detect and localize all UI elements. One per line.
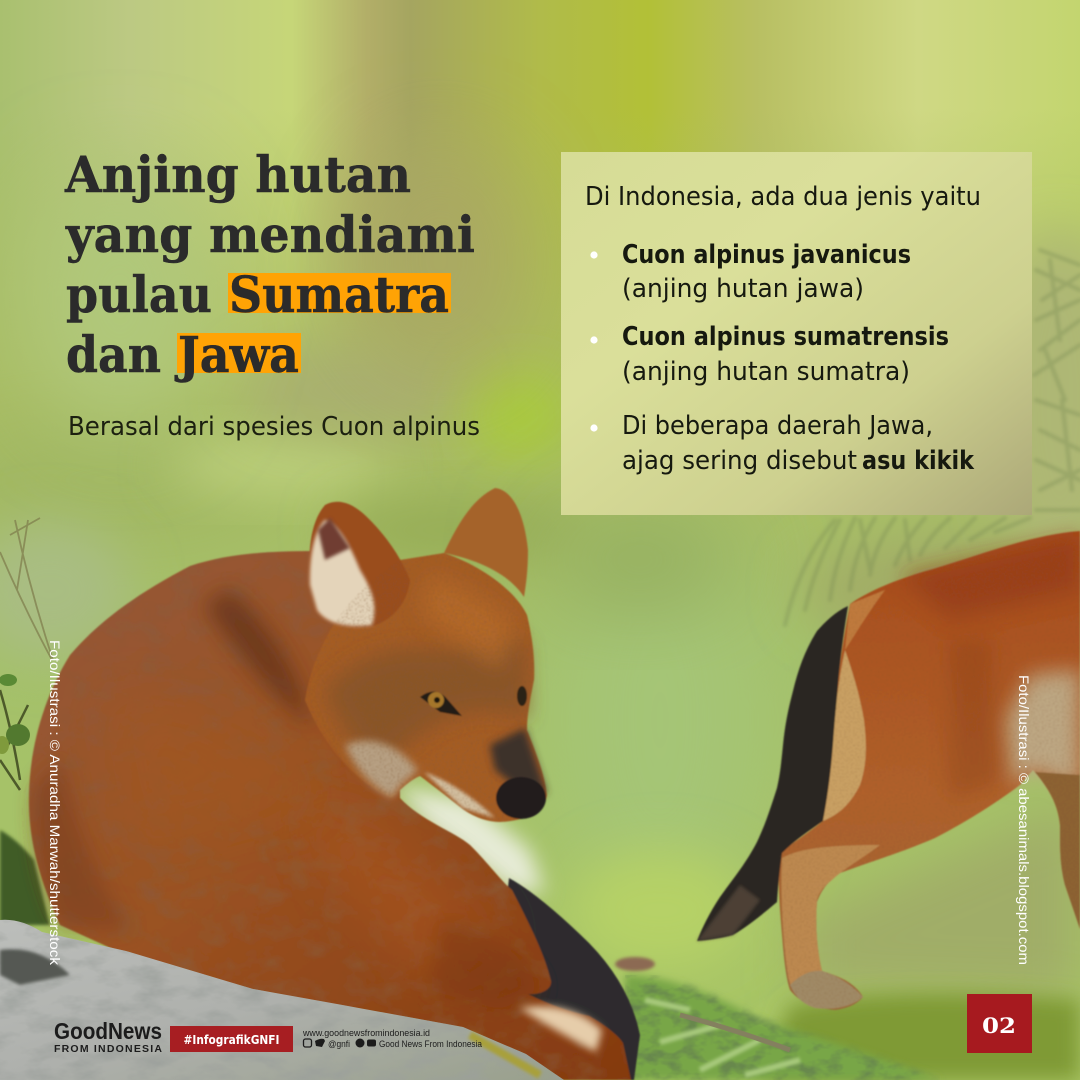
- photo credit right: Foto/Ilustrasi : © abesanimals.blogspot.com: [1016, 675, 1032, 965]
- footer logo: GoodNews: [54, 1018, 162, 1044]
- upper dark band: [900, 535, 1080, 620]
- hashtag badge: #InfografikGNFI: [184, 1033, 280, 1047]
- bullet 1: [590, 240, 911, 304]
- nose: [496, 777, 546, 819]
- bullet 2: Cuon alpinus sumatrensis: [622, 322, 949, 352]
- bullet 3: Di beberapa daerah Jawa,: [622, 411, 933, 441]
- left plant stems and leaves: [0, 518, 53, 925]
- icon: instagram: [304, 1039, 312, 1047]
- title: Jawa: [174, 325, 299, 384]
- orange fold by tail base: [845, 590, 885, 650]
- dhole photo: left animal: [29, 488, 640, 1080]
- title: [64, 145, 475, 384]
- title: dan: [66, 325, 161, 384]
- photo credit left: Foto/Ilustrasi : © Anuradha Marwah/shutterstock: [47, 640, 63, 966]
- footer logo: [54, 1018, 162, 1055]
- ear left inner: [310, 520, 374, 626]
- bamboo leaves illustration: [785, 250, 1080, 625]
- foreground grass: [615, 957, 940, 1080]
- info panel: [561, 152, 1032, 515]
- panel intro: Di Indonesia, ada dua jenis yaitu: [585, 182, 981, 212]
- muzzle dark: [490, 728, 547, 794]
- leg highlight: [781, 845, 880, 1009]
- title: pulau: [66, 265, 212, 324]
- tail black: [500, 878, 640, 1080]
- bullet 1: Cuon alpinus javanicus: [622, 240, 911, 270]
- pale thigh stripe: [823, 650, 866, 821]
- illustrated dhole: right animal: [697, 531, 1080, 1010]
- bullet 2: [590, 322, 949, 387]
- page number badge: 02: [982, 1013, 1016, 1038]
- tail white tip: [520, 1006, 602, 1052]
- bullet 3: asu kikik: [862, 446, 975, 476]
- footer links and social icons: Good News From Indonesia: [379, 1039, 482, 1049]
- bullet 3: ajag sering disebut: [622, 446, 857, 476]
- page number badge: [967, 994, 1032, 1053]
- icon: facebook: [356, 1038, 364, 1048]
- tail tip: [697, 885, 760, 941]
- icon: twitter: [315, 1039, 325, 1047]
- paw: [790, 971, 863, 1009]
- ear right: [444, 488, 528, 597]
- rock: [0, 920, 564, 1080]
- black tail: [697, 606, 848, 941]
- subtitle: Berasal dari spesies Cuon alpinus: [68, 412, 480, 442]
- far eye: [517, 686, 527, 706]
- bullet 1: (anjing hutan jawa): [622, 274, 864, 304]
- hashtag badge: [170, 1026, 293, 1052]
- footer links and social icons: [302, 1028, 482, 1049]
- front leg: [1035, 772, 1080, 929]
- icon: youtube: [367, 1040, 376, 1046]
- title: yang mendiami: [65, 205, 475, 264]
- bullet 3: [590, 411, 975, 476]
- body shading: [205, 590, 312, 725]
- white chest blur behind dhole: [396, 786, 545, 893]
- footer links and social icons: www.goodnewsfromindonesia.id: [302, 1028, 430, 1039]
- footer links and social icons: @gnfi: [328, 1039, 350, 1049]
- bullet 2: (anjing hutan sumatra): [622, 357, 910, 387]
- title: Sumatra: [229, 265, 449, 324]
- ear left: [309, 502, 410, 627]
- body: [779, 531, 1080, 1010]
- fur texture: [305, 553, 547, 822]
- belly pale: [1005, 670, 1080, 790]
- footer logo: FROM INDONESIA: [54, 1043, 162, 1055]
- eye: [420, 692, 462, 716]
- body: [29, 551, 631, 1080]
- head: [305, 553, 547, 822]
- title: Anjing hutan: [64, 145, 411, 204]
